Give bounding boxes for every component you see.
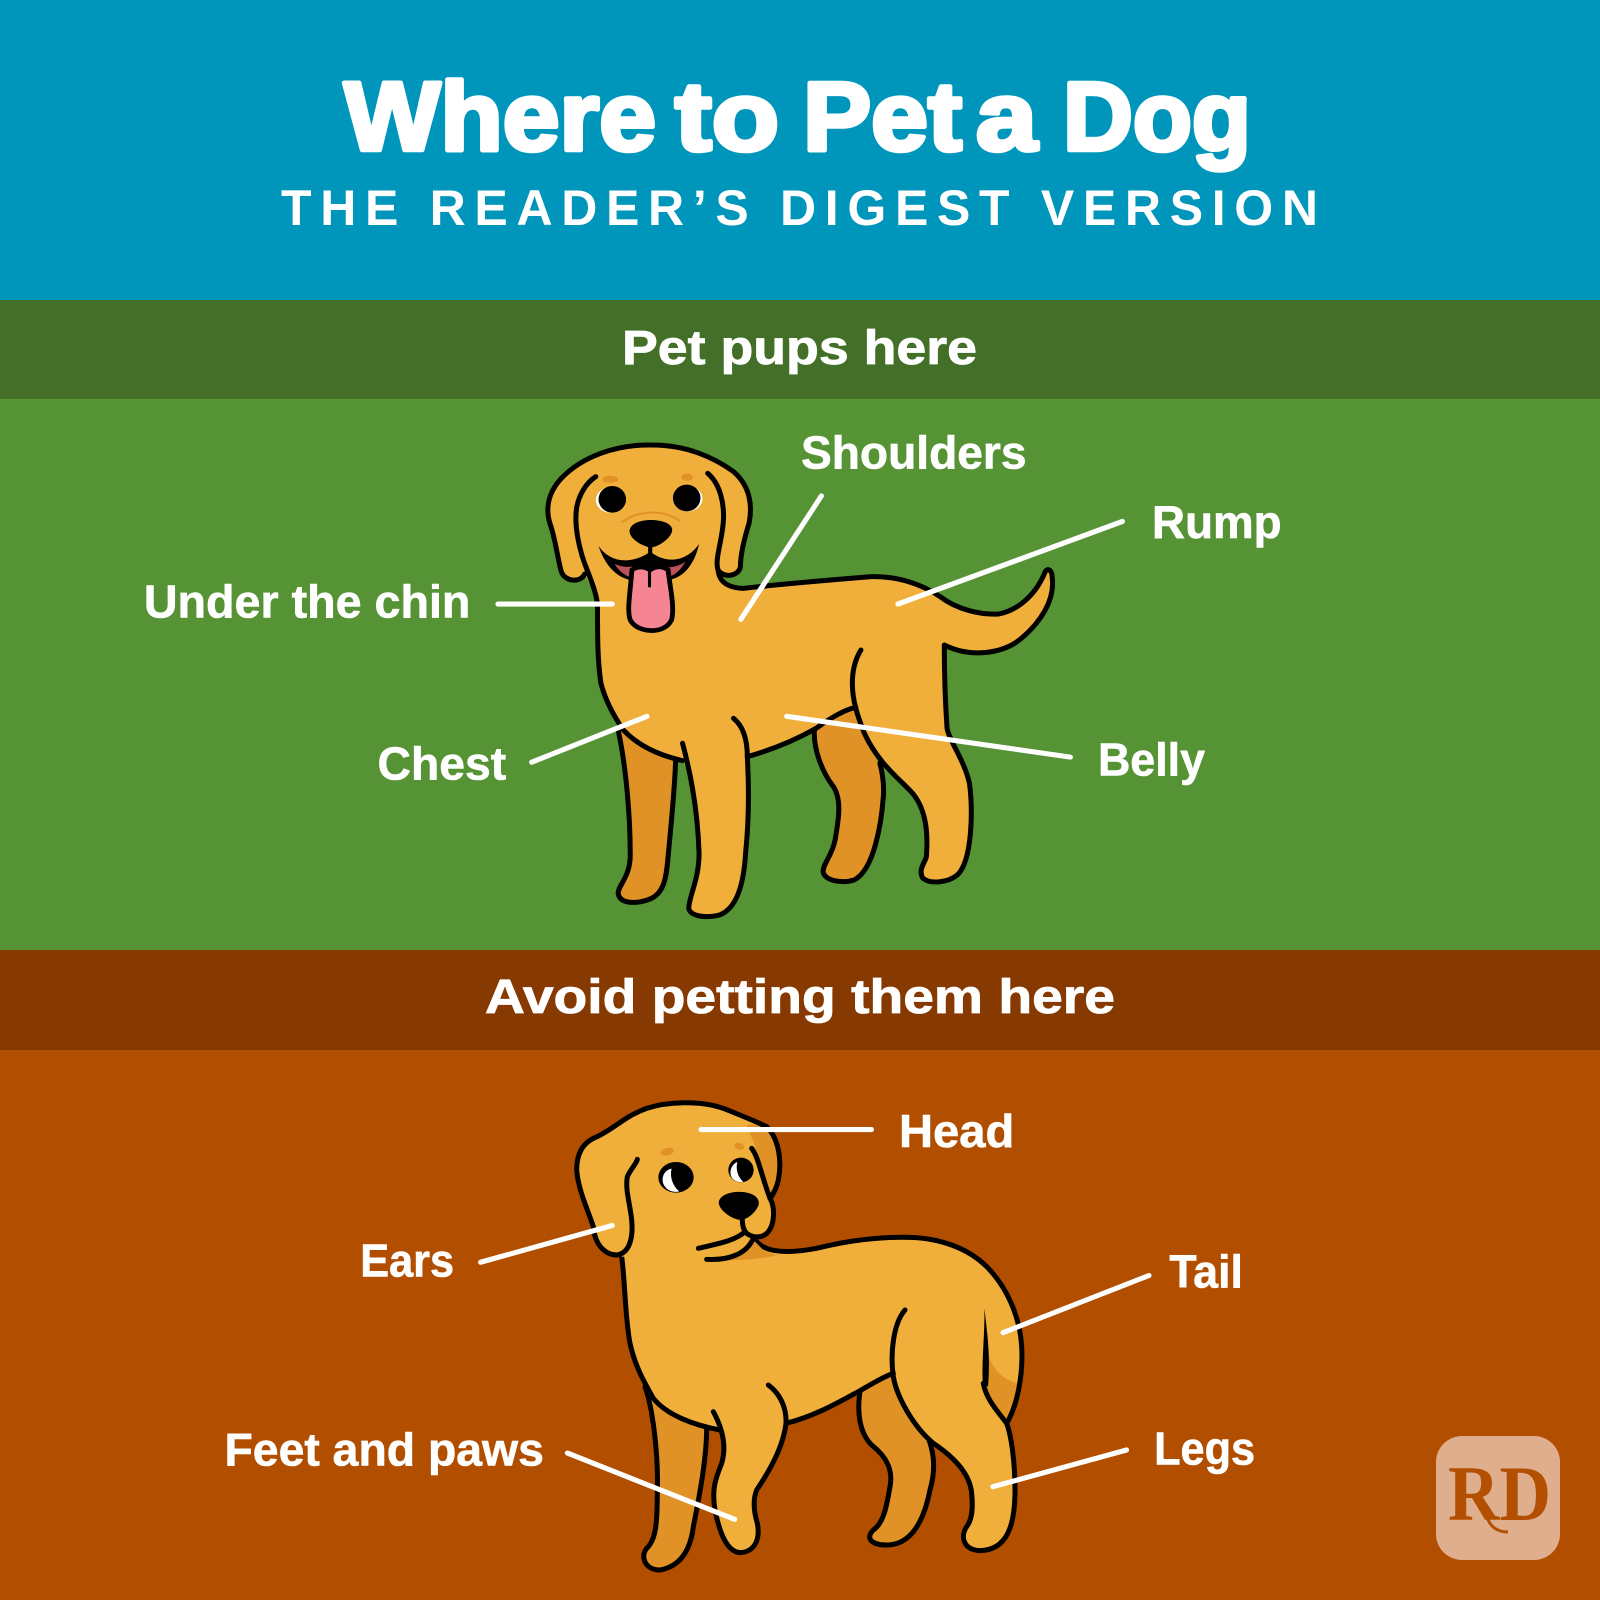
- heading: pet pups here: Pet pups here: [622, 322, 977, 375]
- callout: rump: Rump: [1152, 496, 1282, 548]
- callout: ears: [360, 1226, 612, 1287]
- callout: belly: Belly: [1098, 734, 1206, 786]
- title: a: [976, 62, 1038, 171]
- callout: shoulders: [741, 426, 1027, 619]
- callout: feet and paws: [224, 1423, 735, 1519]
- callout: head: Head: [899, 1105, 1014, 1157]
- callout: ears: Ears: [360, 1235, 454, 1287]
- title: Pet: [803, 62, 962, 171]
- callout: legs: Legs: [1154, 1422, 1255, 1474]
- heading: avoid petting them here: Avoid petting them here: [485, 971, 1115, 1024]
- illustration: happy dog: [548, 445, 1053, 917]
- callout: tail: [1003, 1246, 1243, 1333]
- subtitle: THE READER’S DIGEST VERSION: [281, 180, 1318, 236]
- callout: feet and paws: Feet and paws: [224, 1423, 544, 1475]
- callout: rump: [898, 496, 1282, 604]
- title: [344, 62, 1251, 171]
- panel: header: [0, 0, 1600, 300]
- panel: pet pups here: [0, 300, 1600, 950]
- callout: belly: [787, 716, 1206, 786]
- callout: under the chin: Under the chin: [144, 575, 470, 627]
- callout: chest: [378, 716, 647, 790]
- callout: legs: [993, 1422, 1255, 1487]
- logo: RD badge: [1436, 1436, 1560, 1560]
- illustration: wary dog: [577, 1103, 1022, 1570]
- callout: tail: Tail: [1169, 1246, 1243, 1298]
- callout: chest: Chest: [378, 738, 506, 790]
- title: Where: [344, 62, 656, 171]
- logo: RD badge: RD: [1448, 1450, 1551, 1537]
- panel: avoid petting them here: [0, 950, 1600, 1600]
- title: to: [675, 62, 779, 171]
- title: Dog: [1063, 62, 1251, 171]
- callout: shoulders: Shoulders: [801, 426, 1027, 478]
